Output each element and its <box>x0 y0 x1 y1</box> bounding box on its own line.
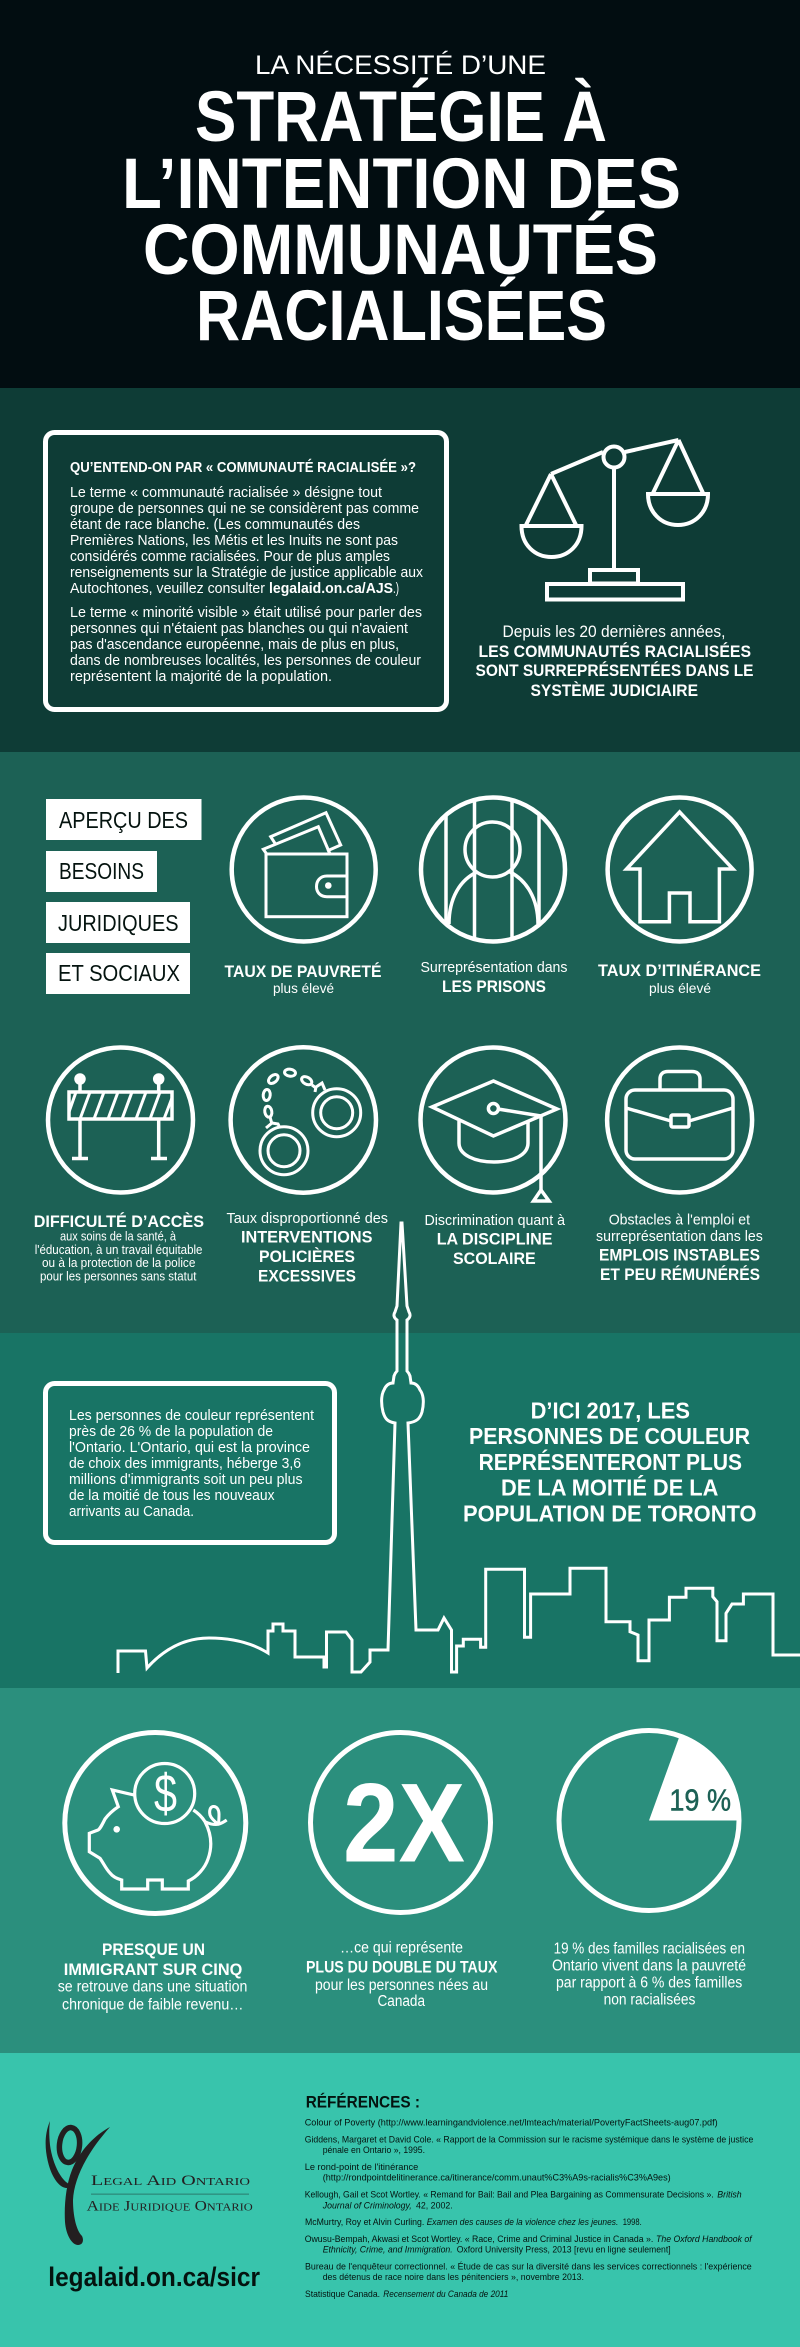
definition paragraph 2: dans de nombreuses localités, les personnes de couleur <box>70 653 421 669</box>
definition paragraph 1: renseignements sur la Stratégie de justice applicable aux <box>70 565 424 581</box>
heading: overview labels: JURIDIQUES <box>58 910 178 936</box>
label: poverty <box>224 962 382 996</box>
label: excessive policing: Taux disproportionné des <box>226 1210 388 1227</box>
title <box>122 78 681 356</box>
heading: Toronto population: DE LA MOITIÉ DE LA <box>501 1474 718 1501</box>
label: low income: chronique de faible revenu… <box>62 1996 243 2013</box>
label: double rate: pour les personnes nées au <box>315 1977 488 1994</box>
panel: Toronto <box>0 1223 800 1688</box>
callout: immigration facts: près de 26 % de la population de <box>69 1424 273 1440</box>
text: overrepresentation statement: LES COMMUNAUTÉS RACIALISÉES <box>478 642 751 661</box>
panel: poverty statistics <box>0 1688 800 2053</box>
label: families in poverty: Ontario vivent dans la pauvreté <box>552 1958 746 1975</box>
label: prisons: LES PRISONS <box>442 977 546 996</box>
reference list: pénale en Ontario », 1995. <box>323 2145 425 2156</box>
callout: immigration facts: Les personnes de couleur représentent <box>69 1408 314 1424</box>
definition paragraph 1: groupe de personnes qui ne se considèrent pas comme <box>70 501 419 517</box>
label: families in poverty <box>552 1940 746 2008</box>
label: access difficulty <box>34 1212 204 1284</box>
definition paragraph 1 <box>70 485 424 597</box>
label: access difficulty: ou à la protection de la police <box>42 1256 195 1270</box>
label: low income: IMMIGRANT SUR CINQ <box>64 1960 242 1979</box>
label: employment: EMPLOIS INSTABLES <box>599 1246 760 1265</box>
icon: 2X circle: 2X <box>343 1761 465 1886</box>
label: access difficulty: aux soins de la santé, à <box>60 1230 176 1244</box>
definition paragraph 1: legalaid.on.ca/AJS <box>269 581 393 597</box>
icon: graduation cap <box>420 1048 566 1201</box>
title: L’INTENTION DES <box>122 145 681 224</box>
label: families in poverty: 19 % des familles racialisées en <box>554 1940 745 1957</box>
label: low income: se retrouve dans une situation <box>58 1979 247 1996</box>
icon: briefcase <box>607 1048 752 1192</box>
definition paragraph 1: Le terme « communauté racialisée » désigne tout <box>70 485 382 501</box>
definition paragraph 1: Premières Nations, les Métis et les Inuits ne sont pas <box>70 533 398 549</box>
callout: definition box <box>46 432 446 710</box>
definition paragraph 1: considérés comme racialisées. Pour de plus amples <box>70 549 390 565</box>
definition paragraph 1: étant de race blanche. (Les communautés des <box>70 517 360 533</box>
reference list: Journal of Criminology, <box>322 2200 412 2211</box>
label: school discipline <box>424 1212 566 1268</box>
reference list: (http://rondpointdelitinerance.ca/itinerance/comm.unaut%C3%A9s-racialis%C3%A9es) <box>323 2173 671 2184</box>
text: overrepresentation statement: SONT SURREPRÉSENTÉES DANS LE <box>476 661 754 680</box>
reference list: Kellough, Gail et Scot Wortley. « Remand for Bail: Bail and Plea Bargaining as Commensurate Decisions ». <box>305 2190 714 2201</box>
label: double rate: PLUS DU DOUBLE DU TAUX <box>306 1958 498 1977</box>
label: double rate: …ce qui représente <box>340 1940 463 1957</box>
reference list: 42, 2002. <box>416 2200 453 2211</box>
icon: handcuffs <box>231 1047 376 1193</box>
definition paragraph 2: pas d'ascendance européenne, mais de plus en plus, <box>70 637 399 653</box>
callout: immigration facts: de la moitié de tous les nouveaux <box>69 1488 275 1504</box>
reference list <box>305 2117 753 2300</box>
callout: immigration facts: millions d'immigrants soit un peu plus <box>69 1472 302 1488</box>
label: access difficulty: l'éducation, à un travail équitable <box>35 1243 203 1257</box>
reference list: Recensement du Canada de 2011 <box>383 2289 508 2300</box>
label: poverty: plus élevé <box>273 980 334 996</box>
reference list: Owusu-Bempah, Akwasi et Scot Wortley. « Race, Crime and Criminal Justice in Canada ». <box>305 2234 653 2245</box>
heading: overview labels: APERÇU DES <box>59 807 188 833</box>
label: families in poverty: non racialisées <box>604 1991 696 2008</box>
reference list: Colour of Poverty (http://www.learningandviolence.net/lmteach/material/PovertyFactSheets-aug07.pdf) <box>305 2117 718 2128</box>
heading: overview labels <box>46 799 202 994</box>
label: school discipline: Discrimination quant à <box>424 1212 566 1229</box>
logo: Legal Aid Ontario: Aide Juridique Ontario <box>87 2199 253 2215</box>
label: double rate: Canada <box>378 1993 425 2010</box>
label: employment: Obstacles à l'emploi et <box>609 1211 751 1228</box>
panel: header <box>0 0 800 388</box>
label: double rate <box>306 1940 498 2010</box>
label: poverty: TAUX DE PAUVRETÉ <box>224 962 382 981</box>
chart: 19 % pie: 19 % <box>669 1783 731 1818</box>
callout: immigration facts: arrivants au Canada. <box>69 1504 194 1520</box>
text: overrepresentation statement: SYSTÈME JUDICIAIRE <box>530 681 698 700</box>
reference list: Examen des causes de la violence chez les jeunes. <box>427 2217 618 2228</box>
label: excessive policing: POLICIÈRES <box>259 1247 355 1266</box>
icon: prison <box>421 798 565 942</box>
label: school discipline: SCOLAIRE <box>453 1249 536 1268</box>
panel: definition <box>0 388 800 752</box>
heading: Toronto population: PERSONNES DE COULEUR <box>469 1423 750 1449</box>
title: RACIALISÉES <box>196 277 607 356</box>
title: COMMUNAUTÉS <box>143 211 658 290</box>
label: access difficulty: DIFFICULTÉ D’ACCÈS <box>34 1212 204 1231</box>
definition heading: QU’ENTEND-ON PAR « COMMUNAUTÉ RACIALISÉE »? <box>70 459 416 476</box>
label: school discipline: LA DISCIPLINE <box>437 1229 552 1248</box>
definition paragraph 1: Autochtones, veuillez consulter <box>70 581 265 597</box>
reference list: Le rond-point de l'itinérance <box>305 2162 418 2173</box>
label: employment: surreprésentation dans les <box>596 1228 763 1245</box>
icon: piggy bank <box>65 1732 246 1914</box>
definition paragraph 2: personnes qui n'étaient pas blanches ou qui n'avaient <box>70 621 408 637</box>
reference list: British <box>717 2190 742 2201</box>
label: access difficulty: pour les personnes sans statut <box>40 1270 197 1284</box>
label: homelessness: plus élevé <box>649 980 711 996</box>
label: homelessness: TAUX D’ITINÉRANCE <box>598 961 761 980</box>
label: excessive policing <box>226 1210 388 1286</box>
label: excessive policing: INTERVENTIONS <box>241 1228 372 1247</box>
label: low income <box>58 1940 247 2013</box>
chart: 19 % pie <box>559 1730 741 1910</box>
subtitle: LA NÉCESSITÉ D’UNE <box>255 50 546 80</box>
definition paragraph 2: Le terme « minorité visible » était utilisé pour parler des <box>70 605 422 621</box>
label: families in poverty: par rapport à 6 % des familles <box>556 1975 743 1992</box>
reference list: Ethnicity, Crime, and Immigration. <box>323 2245 453 2256</box>
reference list: The Oxford Handbook of <box>656 2234 753 2245</box>
label: employment: ET PEU RÉMUNÉRÉS <box>600 1265 760 1284</box>
text: overrepresentation statement: Depuis les 20 dernières années, <box>502 622 726 641</box>
text: overrepresentation statement <box>476 622 754 700</box>
icon: house <box>608 798 752 942</box>
panel: legal and social needs <box>0 752 800 1333</box>
heading: Toronto population: POPULATION DE TORONTO <box>463 1501 757 1527</box>
icon: barrier <box>48 1048 193 1192</box>
references heading: RÉFÉRENCES : <box>306 2092 420 2111</box>
reference list: des détenus de race noire dans les pénitenciers », novembre 2013. <box>323 2272 584 2283</box>
definition paragraph 2: représentent la majorité de la population. <box>70 669 332 685</box>
definition paragraph 2 <box>70 605 422 685</box>
reference list: McMurtry, Roy et Alvin Curling. <box>305 2217 424 2228</box>
heading: overview labels: ET SOCIAUX <box>58 960 180 986</box>
heading: Toronto population <box>463 1397 757 1527</box>
references <box>305 2092 753 2300</box>
title: STRATÉGIE À <box>195 78 607 157</box>
label: employment <box>596 1211 763 1284</box>
heading: overview labels: BESOINS <box>59 858 144 884</box>
icon: wallet <box>232 798 376 942</box>
reference list: 1998. <box>623 2217 642 2228</box>
logo: Legal Aid Ontario <box>46 2121 253 2245</box>
label: prisons: Surreprésentation dans <box>420 959 568 976</box>
heading: Toronto population: D’ICI 2017, LES <box>531 1397 690 1423</box>
reference list: Statistique Canada. <box>305 2289 380 2300</box>
label: prisons <box>420 959 568 996</box>
footer URL: legalaid.on.ca/sicr <box>48 2262 260 2292</box>
definition paragraph 1: .) <box>393 581 399 597</box>
label: homelessness <box>598 961 761 996</box>
icon: piggy bank: $ <box>154 1764 177 1824</box>
callout: immigration facts: de choix des immigrants, héberge 3,6 <box>69 1456 301 1472</box>
heading: Toronto population: REPRÉSENTERONT PLUS <box>479 1448 742 1475</box>
logo: Legal Aid Ontario: Legal Aid Ontario <box>91 2173 250 2189</box>
illustration: Toronto skyline and CN Tower <box>118 1223 800 1673</box>
icon: 2X circle <box>310 1732 490 1912</box>
callout: immigration facts: l'Ontario. L'Ontario, qui est la province <box>69 1440 310 1456</box>
label: excessive policing: EXCESSIVES <box>258 1267 356 1286</box>
label: low income: PRESQUE UN <box>102 1940 205 1959</box>
reference list: Bureau de l'enquêteur correctionnel. « Étude de cas sur la diversité dans les services correctionnels : l'expérience <box>305 2261 752 2272</box>
icon: scales of justice <box>522 440 708 600</box>
callout: immigration facts <box>46 1384 334 1542</box>
reference list: Giddens, Margaret et David Cole. « Rapport de la Commission sur le racisme systémique dans le système de justice <box>305 2134 753 2145</box>
panel: footer <box>0 2053 800 2347</box>
reference list: Oxford University Press, 2013 [revu en ligne seulement] <box>457 2245 671 2256</box>
